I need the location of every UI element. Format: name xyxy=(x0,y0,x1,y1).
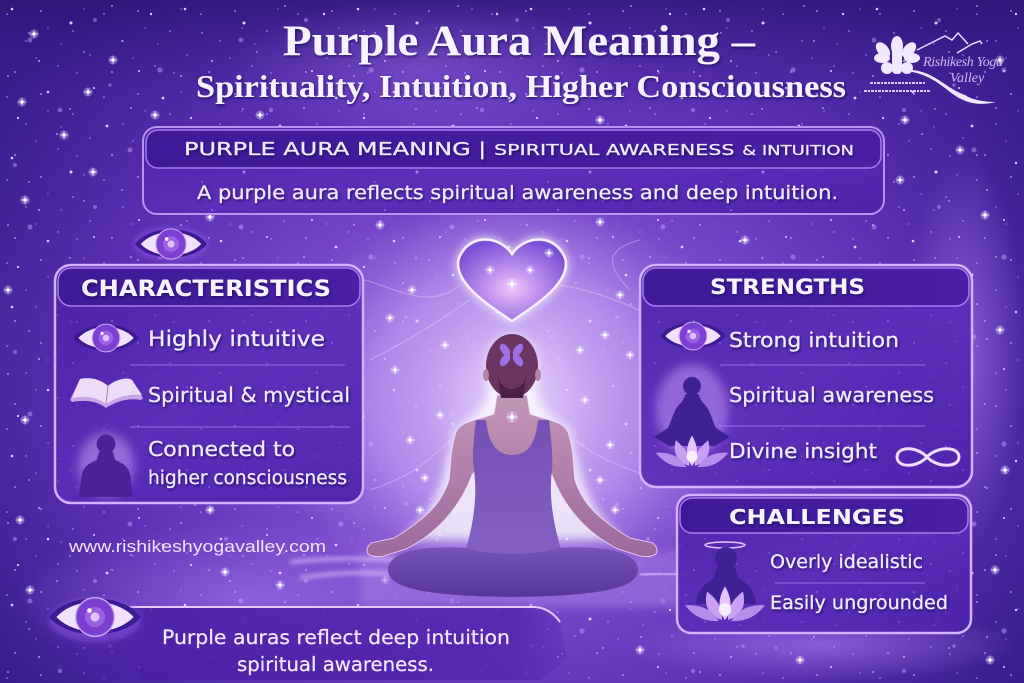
overly idealistic: Overly idealistic xyxy=(770,551,923,573)
icon: person with aura xyxy=(78,433,134,497)
challenges heading xyxy=(680,498,968,533)
logo tagline: illegible in the source, drawn as fine strokes xyxy=(864,83,931,91)
icon: eye xyxy=(73,324,139,352)
spiritual awareness: Spiritual awareness xyxy=(729,383,934,407)
icon: eye xyxy=(660,322,726,350)
connected to higher consciousness xyxy=(148,437,347,489)
connected to higher consciousness: higher consciousness xyxy=(148,468,347,489)
icon: banner eye xyxy=(49,598,141,642)
icon: open book xyxy=(70,378,143,408)
meditating figure xyxy=(367,334,657,597)
panel: characteristics: CHARACTERISTICS xyxy=(81,277,331,302)
logo name: Rishikesh Yoga xyxy=(922,55,1003,70)
icon: top eye xyxy=(133,226,209,262)
crossed legs xyxy=(388,547,638,597)
divine insight: Divine insight xyxy=(729,439,877,463)
bottom banner xyxy=(49,598,566,680)
strengths heading xyxy=(643,268,969,306)
intro heading bar xyxy=(146,130,881,168)
website url: www.rishikeshyogavalley.com xyxy=(68,537,326,556)
hair bun shadow xyxy=(497,372,527,398)
banner text: Purple auras reflect deep intuition xyxy=(162,626,510,649)
panel: challenges: CHALLENGES xyxy=(729,505,905,529)
icon: meditator on lotus xyxy=(654,364,730,467)
title: Spirituality, Intuition, Higher Consciousness xyxy=(196,68,846,104)
highly intuitive: Highly intuitive xyxy=(148,327,325,351)
icon: lotus flower logo xyxy=(873,36,920,74)
heart xyxy=(457,238,567,322)
logo mountains xyxy=(917,33,982,53)
figure glow xyxy=(400,336,625,540)
neck chakra star xyxy=(506,410,518,424)
easily ungrounded: Easily ungrounded xyxy=(770,592,948,614)
intro heading: PURPLE AURA MEANING | SPIRITUAL AWARENESS & INTUITION xyxy=(184,139,854,160)
banner text: spiritual awareness. xyxy=(237,653,434,676)
hair flower xyxy=(498,342,525,368)
head xyxy=(486,334,538,398)
logo: Rishikesh Yoga Valley xyxy=(864,33,1003,104)
spiritual and mystical: Spiritual & mystical xyxy=(148,383,350,407)
panel: characteristics xyxy=(55,265,363,503)
characteristics heading xyxy=(58,268,360,306)
icon: infinity xyxy=(897,449,959,465)
intro text: A purple aura reflects spiritual awareness and deep intuition. xyxy=(197,182,838,204)
light rays around figure xyxy=(365,240,660,490)
logo swoosh xyxy=(912,70,996,104)
panel: strengths xyxy=(640,265,972,487)
panel: strengths: STRENGTHS xyxy=(710,275,865,299)
strong intuition: Strong intuition xyxy=(729,328,899,352)
floor with light streaks xyxy=(290,552,690,607)
title: Purple Aura Meaning – xyxy=(283,18,756,65)
panel: challenges xyxy=(677,495,971,633)
arms and back xyxy=(367,395,657,557)
tank top xyxy=(464,420,563,556)
ears xyxy=(483,369,541,381)
icon: figure on lotus with halo xyxy=(685,542,765,621)
connected to higher consciousness: Connected to xyxy=(148,437,295,461)
title xyxy=(196,18,846,104)
logo name second line: Valley xyxy=(950,71,985,86)
panel: intro banner xyxy=(143,127,884,214)
banner text xyxy=(162,626,510,676)
